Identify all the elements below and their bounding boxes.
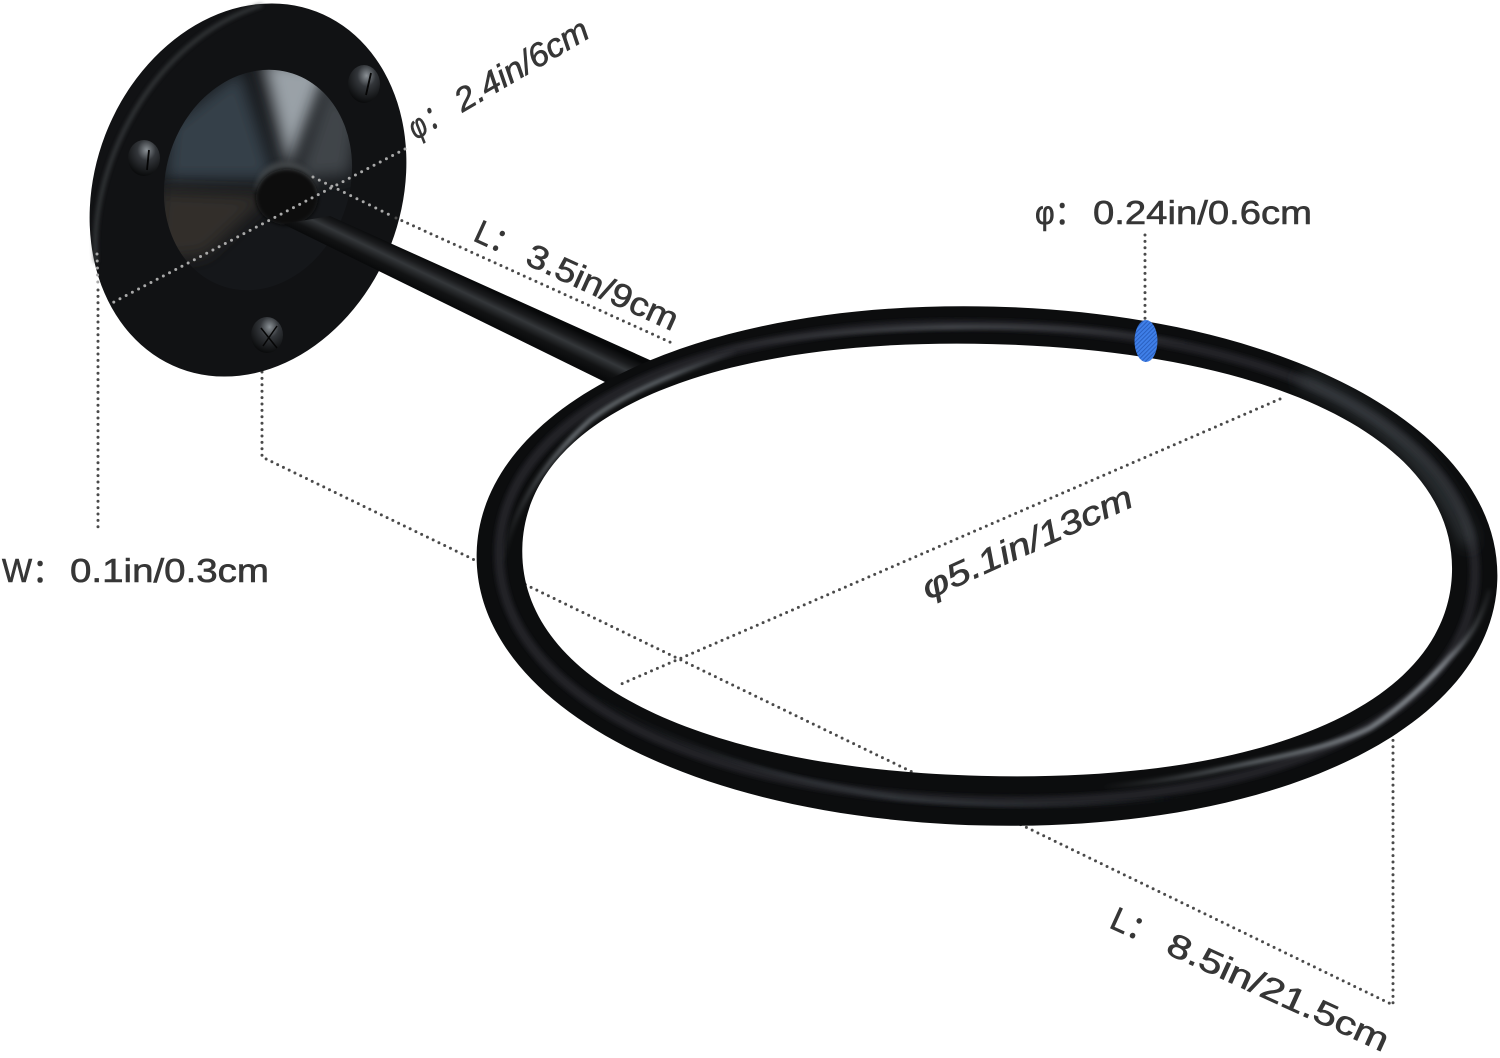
label: plate diameter: φ：	[401, 93, 456, 146]
plate disc	[37, 0, 459, 423]
label: plate diameter: 2.4in/6cm	[446, 11, 595, 119]
wall plate	[90, 1, 406, 376]
rod	[283, 216, 652, 383]
label: tube diameter	[1035, 194, 1312, 231]
plate edge highlight	[95, 5, 262, 262]
dotted line: plate thickness	[96, 290, 100, 532]
plate hub	[255, 161, 318, 225]
plate cone	[164, 70, 352, 267]
label: tube diameter: φ：	[1035, 194, 1085, 231]
label: rod length	[469, 213, 685, 338]
dotted line: total length	[262, 372, 1393, 1005]
label: plate diameter	[401, 11, 595, 146]
dotted line: plate diameter	[112, 149, 405, 303]
label: total length	[1105, 900, 1395, 1058]
screw: top right	[348, 65, 380, 103]
ring body	[470, 293, 1500, 839]
label: plate thickness	[2, 552, 269, 589]
label: rod length: L：	[469, 213, 528, 266]
blue tube cross-section	[1134, 320, 1158, 362]
screw: bottom	[251, 317, 283, 353]
screw: left	[128, 140, 160, 176]
label: total length: 8.5in/21.5cm	[1162, 925, 1395, 1058]
dotted line: tube diameter	[1144, 235, 1146, 320]
ring	[470, 293, 1500, 839]
label: rod length: 3.5in/9cm	[521, 236, 685, 338]
label: ring diameter: φ5.1in/13cm	[916, 478, 1138, 606]
label: tube diameter: 0.24in/0.6cm	[1093, 194, 1312, 231]
dotted line: rod length on plate	[313, 177, 394, 217]
label: total length: L：	[1105, 900, 1166, 954]
dotted line: ring diameter	[619, 399, 1280, 685]
label: plate thickness: 0.1in/0.3cm	[70, 552, 269, 589]
dotted line: rod length	[396, 218, 672, 343]
ring shading	[493, 312, 1490, 814]
label: plate thickness: W：	[2, 552, 64, 589]
dotted line: plate thickness on plate	[97, 254, 98, 288]
